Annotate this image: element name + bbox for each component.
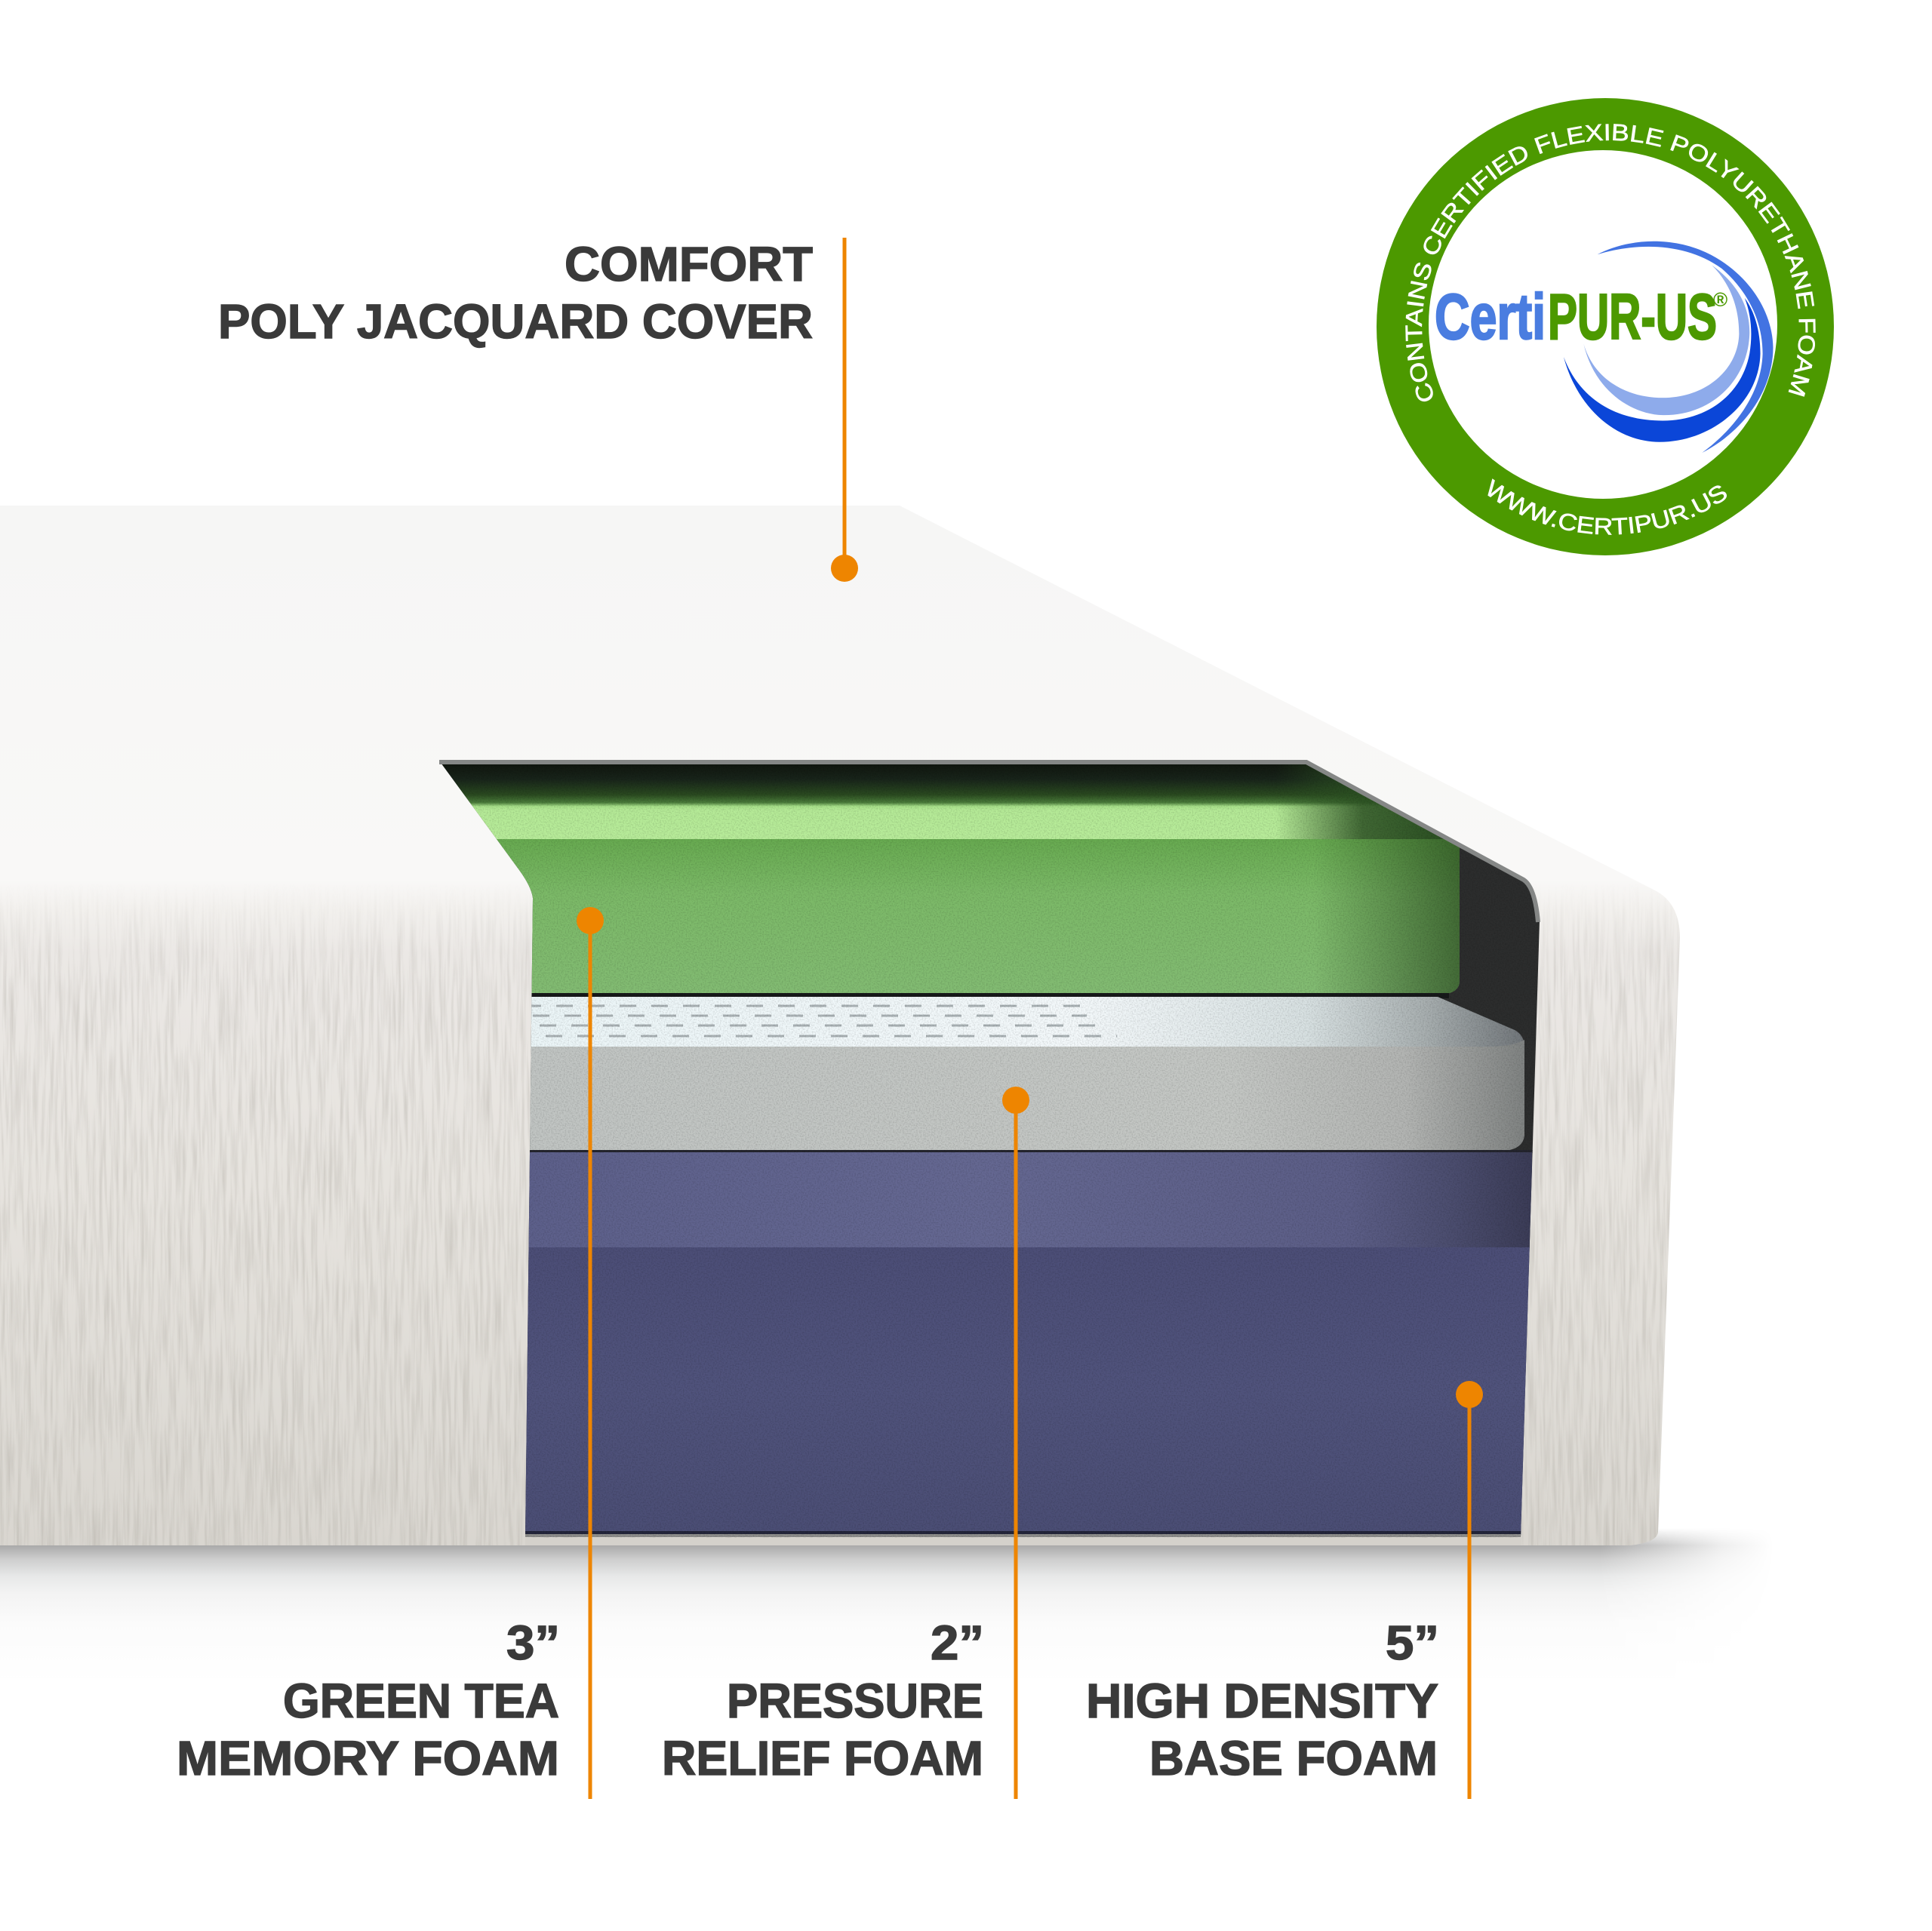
leader line: [842, 238, 847, 568]
logo wordmark: ®: [1713, 288, 1727, 311]
label: RELIEF FOAM: [662, 1731, 983, 1785]
green tea memory foam layer: [430, 761, 1460, 998]
label: POLY JACQUARD COVER: [218, 294, 813, 349]
label: [1086, 1616, 1439, 1785]
label: 3”: [506, 1616, 560, 1670]
label: [662, 1616, 984, 1785]
callout: green tea memory foam: [177, 907, 604, 1799]
leader dot: [831, 555, 858, 582]
label: HIGH DENSITY: [1086, 1674, 1438, 1728]
callout: pressure relief foam: [662, 1087, 1029, 1799]
label: [218, 237, 813, 349]
perforation dots: [525, 1006, 1117, 1036]
label: PRESSURE: [727, 1674, 983, 1728]
label: [177, 1616, 560, 1785]
label: 2”: [931, 1616, 984, 1670]
callout: high density base foam: [1086, 1381, 1483, 1799]
callout: comfort cover: [218, 237, 858, 582]
logo wordmark: [1435, 281, 1727, 353]
cover bottom lip below cutaway: [525, 1538, 1521, 1545]
label: COMFORT: [565, 237, 813, 291]
leader dot: [1002, 1087, 1029, 1114]
badge: CertiPUR-US seal: [1377, 98, 1834, 555]
pressure relief foam layer: [521, 997, 1524, 1151]
cutaway rim: [439, 762, 1538, 922]
logo wordmark: PUR-US: [1548, 281, 1717, 353]
mattress cutaway with foam layers: [430, 755, 1555, 1547]
leader dot: [1456, 1381, 1483, 1408]
leader line: [589, 921, 592, 1799]
label: 5”: [1386, 1616, 1439, 1670]
swoosh logo: [1564, 241, 1773, 453]
mattress cover: [0, 506, 1736, 1562]
ring text bottom: WWW.CERTIPUR.US: [1487, 478, 1727, 535]
leader line: [1014, 1100, 1017, 1799]
logo wordmark: Certi: [1435, 281, 1546, 353]
label: GREEN TEA: [283, 1674, 559, 1728]
label: BASE FOAM: [1149, 1731, 1438, 1785]
high density base foam layer: [521, 1150, 1547, 1539]
leader dot: [577, 907, 604, 934]
green ring: [1377, 98, 1834, 555]
label: MEMORY FOAM: [177, 1731, 559, 1785]
leader line: [1467, 1394, 1472, 1799]
floor shadow under mattress: [0, 1530, 1748, 1607]
ring text top: CONTAINS CERTIFIED FLEXIBLE POLYURETHANE FOAM: [1405, 124, 1816, 401]
